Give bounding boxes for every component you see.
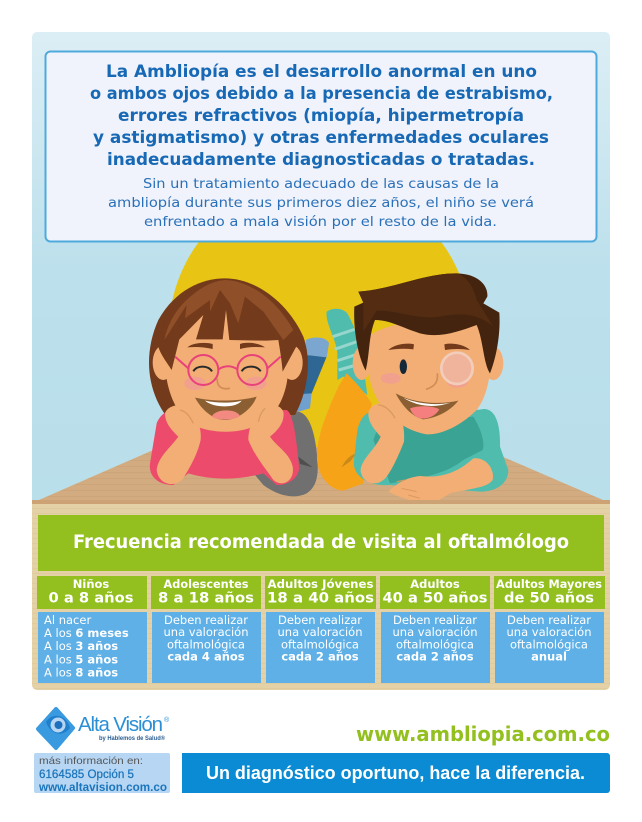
column: adults: Adultos xyxy=(410,577,460,591)
icon: diamond eye xyxy=(38,709,73,748)
column: children: 0 a 8 años xyxy=(48,590,134,606)
column: children: A los 3 años xyxy=(44,639,118,653)
column: adults: una valoración xyxy=(393,625,477,639)
heading: recommended frequency: Frecuencia recomendada de visita al oftalmólogo xyxy=(73,532,569,553)
column: adolescents: Deben realizar xyxy=(164,613,248,627)
heading: recommended frequency xyxy=(38,515,604,571)
column: adolescents: cada 4 años xyxy=(167,650,245,664)
logo: Alta Visión: by Hablemos de Salud® xyxy=(99,735,166,742)
column: children: A los 5 años xyxy=(44,652,118,666)
banner: slogan: Un diagnóstico oportuno, hace la diferencia. xyxy=(206,763,585,783)
illustration: children xyxy=(149,273,508,504)
logo: Alta Visión xyxy=(38,709,170,748)
boy xyxy=(353,273,508,504)
boy's teal shirt xyxy=(354,409,508,492)
column: older adults: anual xyxy=(531,650,567,664)
girl's nose xyxy=(217,378,230,389)
heading: amblyopia definition: errores refractivos (miopía, hipermetropía xyxy=(118,106,524,125)
girl's closed eyes xyxy=(193,367,261,371)
logo: Alta Visión: ® xyxy=(164,716,170,724)
column: children: A los 6 meses xyxy=(44,626,129,640)
heading: amblyopia definition: o ambos ojos debido a la presencia de estrabismo, xyxy=(90,84,553,103)
heading: amblyopia definition: La Ambliopía es el desarrollo anormal en uno xyxy=(106,62,537,81)
boy's hand and arm xyxy=(361,403,404,483)
boy's ears xyxy=(353,347,371,380)
panel: contact information: más información en: xyxy=(39,755,143,767)
boy's eye xyxy=(400,359,407,374)
girl's fringe highlights xyxy=(164,280,293,340)
boy's leg and striped sock xyxy=(317,309,372,491)
text: treatment warning: enfrentado a mala visión por el resto de la vida. xyxy=(144,214,497,230)
panel: introduction box xyxy=(46,52,596,242)
column: children: Niños xyxy=(73,577,109,591)
heading: amblyopia definition xyxy=(90,62,553,169)
panel: visit frequency table xyxy=(32,500,610,690)
boy's eye patch xyxy=(441,353,473,384)
girl's ears xyxy=(153,345,174,380)
girl's cheeks xyxy=(184,377,206,390)
column: adults: cada 2 años xyxy=(396,650,474,664)
column: older adults: oftalmológica xyxy=(510,638,588,652)
heading: amblyopia definition: inadecuadamente diagnosticadas o tratadas. xyxy=(107,150,535,169)
panel: contact information: 6164585 Opción 5 xyxy=(39,769,134,781)
column: older adults: una valoración xyxy=(507,625,591,639)
girl's eyebrows xyxy=(187,343,265,349)
logo: Alta Visión: Alta Visión xyxy=(78,713,163,736)
text: treatment warning: ambliopía durante sus primeros diez años, el niño se verá xyxy=(108,195,534,211)
column: adults: oftalmológica xyxy=(396,638,474,652)
girl's leg and sock xyxy=(230,338,329,496)
column: young adults: 18 a 40 años xyxy=(267,590,374,606)
column: adolescents xyxy=(151,576,261,683)
column: older adults: Adultos Mayores xyxy=(496,577,602,591)
column: adults: 40 a 50 años xyxy=(382,590,488,606)
girl's face xyxy=(165,303,289,432)
girl's hands and arms xyxy=(157,405,201,484)
heading: amblyopia definition: y astigmatismo) y otras enfermedades oculares xyxy=(93,128,549,147)
boy's face xyxy=(367,320,490,434)
girl's back hair xyxy=(149,278,308,417)
column: older adults: Deben realizar xyxy=(507,613,591,627)
column: older adults: de 50 años xyxy=(504,590,594,606)
column: adolescents: una valoración xyxy=(164,625,248,639)
column: children: Al nacer xyxy=(44,613,91,627)
text: treatment warning xyxy=(108,176,534,230)
boy's hair xyxy=(354,273,500,373)
column: young adults xyxy=(265,576,376,683)
boy's cheeks xyxy=(381,373,401,384)
panel: sky background xyxy=(32,32,610,504)
website link: www.ambliopia.com.co xyxy=(356,722,610,746)
floor: wooden surface xyxy=(32,447,610,503)
column: young adults: Deben realizar xyxy=(278,613,362,627)
girl xyxy=(149,278,308,485)
banner: slogan xyxy=(182,753,610,793)
column: adults: Deben realizar xyxy=(393,613,477,627)
girl's pink shirt xyxy=(150,410,299,485)
column: older adults xyxy=(494,576,605,683)
text: treatment warning: Sin un tratamiento adecuado de las causas de la xyxy=(143,176,499,192)
panel: contact information: www.altavision.com.co xyxy=(38,782,167,794)
girl's mouth xyxy=(195,397,257,420)
column: children xyxy=(37,576,147,683)
icon: yellow sun xyxy=(169,181,471,483)
boy's eyebrows xyxy=(388,344,470,350)
column: young adults: Adultos Jóvenes xyxy=(268,577,374,591)
column: adolescents: 8 a 18 años xyxy=(158,590,254,606)
girl's fringe xyxy=(158,279,302,372)
column: young adults: una valoración xyxy=(278,625,362,639)
boy's mouth xyxy=(396,393,458,419)
column: children: A los 8 años xyxy=(44,666,118,680)
column: adolescents: Adolescentes xyxy=(164,577,249,591)
column: adolescents: oftalmológica xyxy=(167,638,245,652)
boy's nose xyxy=(426,373,438,389)
column: adults xyxy=(380,576,490,683)
girl's glasses xyxy=(175,355,281,385)
column: young adults: oftalmológica xyxy=(281,638,359,652)
panel: contact information xyxy=(34,753,170,794)
column: young adults: cada 2 años xyxy=(281,650,359,664)
